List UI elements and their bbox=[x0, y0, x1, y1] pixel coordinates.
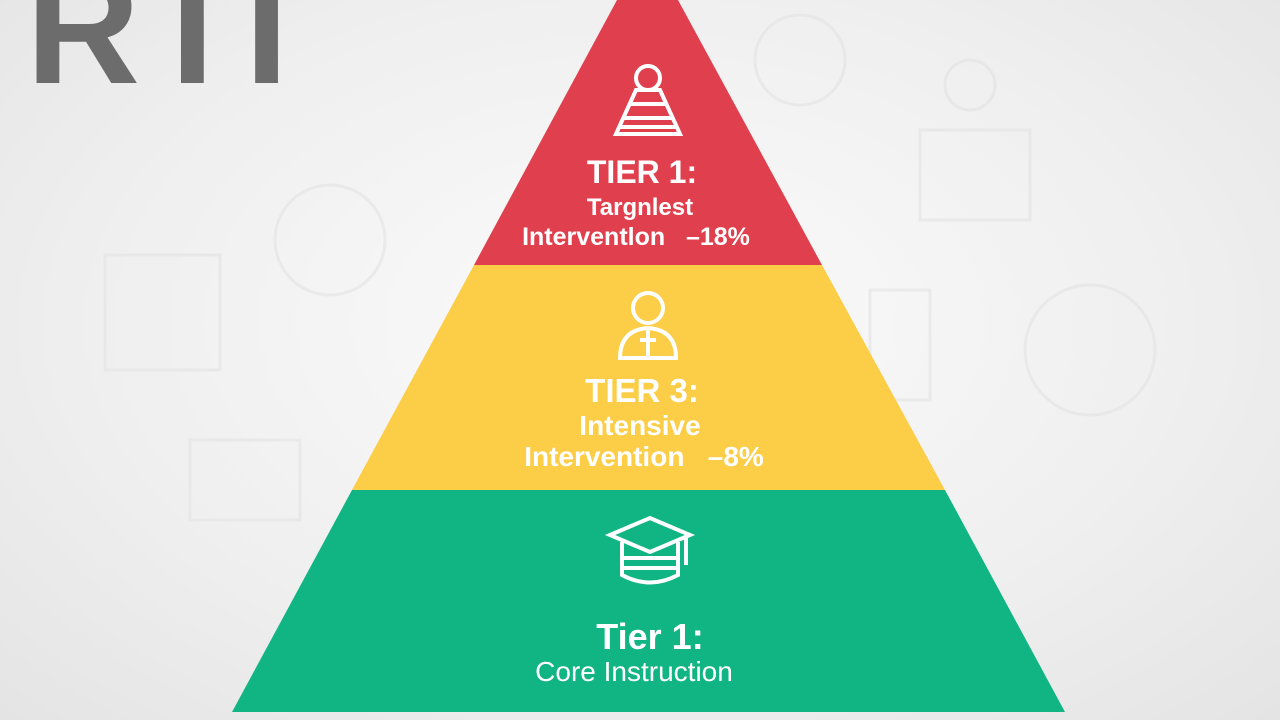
text: Tier 1: bbox=[596, 616, 704, 657]
tier red bbox=[474, 0, 822, 265]
icon: teacher bbox=[620, 293, 676, 358]
text: Targnlest bbox=[587, 194, 693, 221]
text: Core Instruction bbox=[535, 656, 733, 687]
text: tier red bbox=[522, 154, 750, 251]
text: tier yellow bbox=[524, 372, 764, 472]
text: tier green bbox=[535, 616, 733, 687]
text: Intensive bbox=[579, 410, 701, 441]
text: Interventlon –18% bbox=[522, 223, 750, 251]
tier green bbox=[232, 490, 1065, 712]
icon: graduation cap bbox=[610, 518, 690, 582]
text: TIER 1: bbox=[587, 154, 697, 190]
icon: pyramid person bbox=[616, 66, 680, 134]
tier yellow bbox=[352, 265, 945, 490]
text: Intervention –8% bbox=[524, 441, 764, 472]
text: TIER 3: bbox=[585, 372, 699, 409]
